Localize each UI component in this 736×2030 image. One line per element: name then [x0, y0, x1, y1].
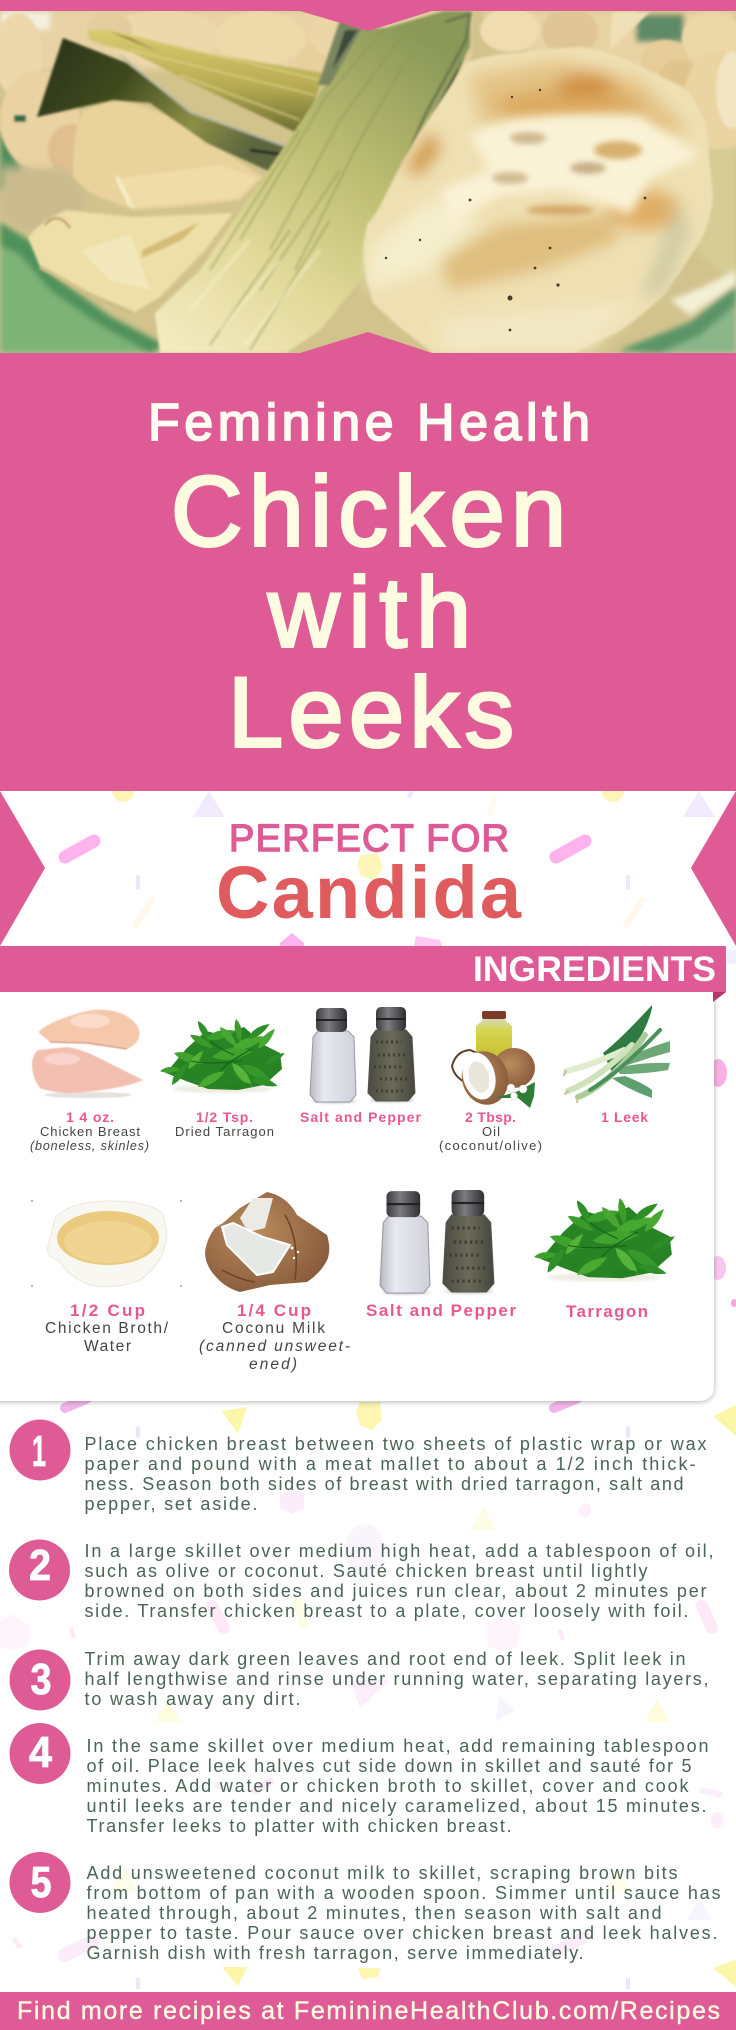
step 2: 2 — [29, 1541, 51, 1590]
right ribbon tail — [691, 791, 736, 946]
labels row 2: Water — [84, 1338, 131, 1355]
labels row 1: Chicken Breast — [40, 1124, 140, 1139]
labels row 1: 1 Leek — [601, 1109, 648, 1125]
step 1: ness. Season both sides of breast with dried tarragon, salt and — [84, 1474, 684, 1494]
step 5: Add unsweetened coconut milk to skillet, scraping brown bits — [86, 1863, 678, 1883]
ingredient: leek — [564, 1005, 670, 1102]
banner: perfect for candida — [0, 791, 736, 946]
step 2: side. Transfer chicken breast to a plate, cover loosely with foil. — [84, 1601, 689, 1621]
step 5: pepper to taste. Pour sauce over chicken breast and leek halves. — [86, 1923, 718, 1943]
lower-left leek end — [28, 210, 233, 313]
pasta sheet — [73, 100, 263, 210]
step 3: Trim away dark green leaves and root end of leek. Split leek in — [84, 1649, 686, 1669]
step 4: 4 — [29, 1728, 52, 1777]
ingredient: salt and pepper large — [380, 1190, 494, 1295]
step 1: 1 — [32, 1427, 46, 1476]
confetti on side strip and below card — [0, 950, 736, 1989]
step 1: Place chicken breast between two sheets of plastic wrap or wax — [84, 1434, 707, 1454]
step 1: pepper, set aside. — [84, 1494, 258, 1514]
heading: Chicken with Leeks: Chicken — [171, 456, 566, 566]
step 5: Garnish dish with fresh tarragon, serve immediately. — [86, 1943, 584, 1963]
labels row 1: Dried Tarragon — [175, 1124, 274, 1139]
heading: Chicken with Leeks: Leeks — [228, 656, 514, 768]
ingredients card — [0, 985, 714, 1401]
text: perfect for: PERFECT FOR — [229, 818, 509, 860]
step 2 — [9, 1540, 713, 1621]
labels row 2: Coconu Milk — [222, 1320, 325, 1337]
step 4: Transfer leeks to platter with chicken breast. — [86, 1816, 512, 1836]
labels row 2 — [45, 1301, 648, 1373]
step 3 — [10, 1649, 708, 1710]
labels row 2: ened) — [249, 1356, 297, 1373]
step 4: minutes. Add water or chicken broth to skillet, cover and cook — [86, 1776, 690, 1796]
labels row 2: Tarragon — [566, 1302, 648, 1321]
step 5: 5 — [30, 1858, 52, 1907]
step 3: to wash away any dirt. — [84, 1689, 300, 1709]
ingredient: coconut milk — [205, 1192, 329, 1292]
subtitle: Feminine Health: Feminine Health — [148, 394, 590, 452]
food photo: chicken with leeks — [0, 8, 736, 353]
ingredient: chicken breast — [32, 1010, 143, 1098]
step 5: from bottom of pan with a wooden spoon. Simmer until sauce has — [86, 1883, 720, 1903]
heading: Chicken with Leeks: with — [267, 556, 471, 668]
labels row 2: 1/4 Cup — [237, 1301, 311, 1320]
labels row 2: 1/2 Cup — [70, 1301, 145, 1320]
labels row 1: 1 4 oz. — [66, 1109, 114, 1125]
dark leek — [37, 38, 290, 173]
step 1: paper and pound with a meat mallet to about a 1/2 inch thick- — [84, 1454, 696, 1474]
labels row 1: 1/2 Tsp. — [196, 1109, 253, 1125]
step 2: browned on both sides and juices run clear, about 2 minutes per — [84, 1581, 706, 1601]
labels row 2: Salt and Pepper — [366, 1301, 516, 1320]
sauce on plate — [0, 165, 90, 235]
chicken browning and sauce — [370, 60, 700, 353]
title panel — [0, 332, 736, 791]
step 4: In the same skillet over medium heat, add remaining tablespoon — [86, 1736, 709, 1756]
ingredient: tarragon large — [534, 1197, 677, 1282]
labels row 1: Salt and Pepper — [300, 1109, 422, 1125]
step 3: half lengthwise and rinse under running water, separating layers, — [84, 1669, 708, 1689]
big centre leek — [155, 11, 470, 353]
labels row 1: Oil — [482, 1124, 500, 1139]
footer: Find more recipies at FeminineHealthClub.com/Recipes — [17, 1997, 720, 2025]
ingredient: oil and coconut — [452, 1011, 535, 1110]
labels row 1: (coconut/olive) — [439, 1138, 542, 1153]
pasta — [0, 8, 736, 176]
top pink band with notch — [0, 0, 736, 31]
text: candida: Candida — [216, 851, 522, 934]
step 1 — [10, 1420, 707, 1514]
green plate — [0, 150, 736, 353]
chicken breast — [363, 47, 713, 353]
upper leek — [87, 30, 323, 133]
left ribbon tail — [0, 791, 45, 946]
labels row 1: 2 Tbsp. — [465, 1109, 516, 1125]
labels row 1 — [30, 1109, 648, 1153]
labels row 1: (boneless, skinles) — [30, 1139, 149, 1153]
ingredient: salt and pepper — [310, 1007, 415, 1104]
heading: Chicken with Leeks — [171, 456, 566, 768]
step 2: such as olive or coconut. Sauté chicken breast until lightly — [84, 1561, 648, 1581]
step 5 — [10, 1852, 720, 1963]
step 5: heated through, about 2 minutes, then season with salt and — [86, 1903, 662, 1923]
heading: ingredients: INGREDIENTS — [473, 950, 716, 989]
labels row 2: (canned unsweet- — [199, 1338, 350, 1355]
ingredient: dried tarragon — [160, 1018, 286, 1093]
ingredients header bar — [0, 946, 726, 1002]
step 4 — [10, 1723, 709, 1836]
step 4: until leeks are tender and nicely caramelized, about 15 minutes. — [86, 1796, 707, 1816]
ingredient: chicken broth bowl — [31, 1200, 182, 1287]
step 2: In a large skillet over medium high heat, add a tablespoon of oil, — [84, 1541, 713, 1561]
step 3: 3 — [30, 1655, 52, 1704]
step 4: of oil. Place leek halves cut side down in skillet and sauté for 5 — [86, 1756, 691, 1776]
labels row 2: Chicken Broth/ — [45, 1320, 169, 1337]
